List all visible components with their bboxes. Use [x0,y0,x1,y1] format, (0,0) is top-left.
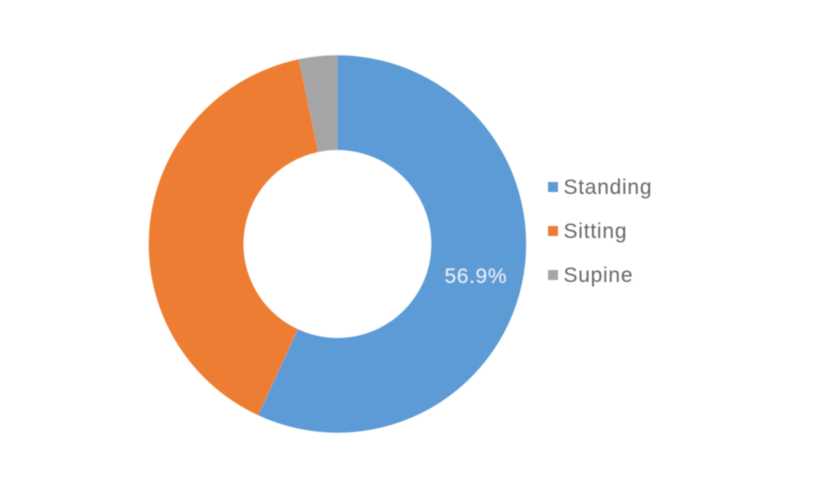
legend item: Sitting: Sitting [564,220,626,243]
segment: Supine [299,55,337,152]
donut chart [149,55,526,433]
legend [548,176,652,287]
legend item: Supine: Supine [564,264,632,287]
legend item: Standing: Standing [564,176,652,199]
segment: Standing 56.9% [258,55,526,433]
segment: Sitting [149,59,318,415]
data label: 56.9%: 56.9% [444,265,506,288]
